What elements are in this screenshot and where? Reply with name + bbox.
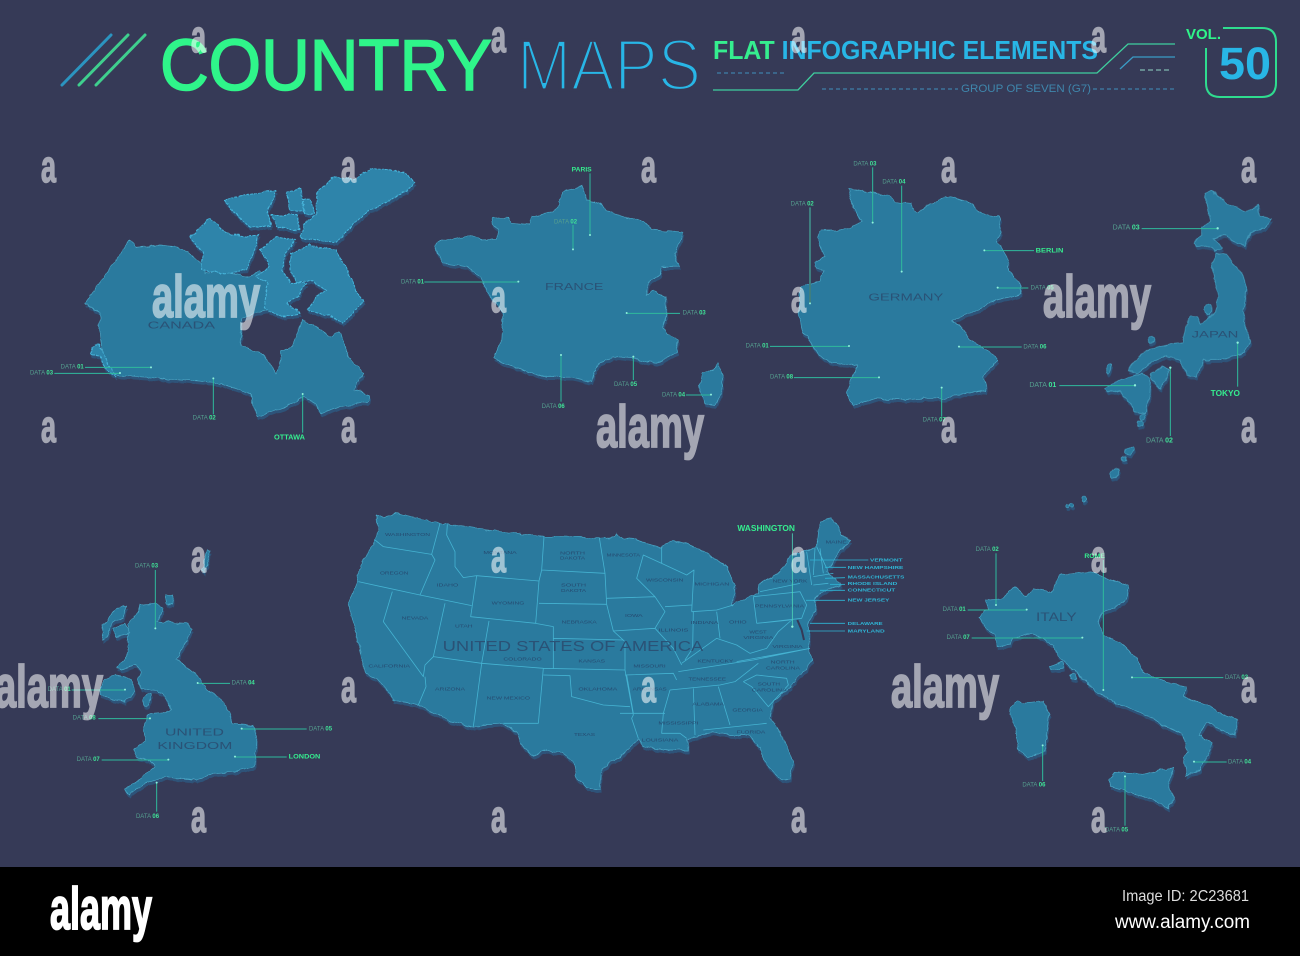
state names: east: ALABAMA: [692, 702, 725, 707]
callout: ottawa: [274, 393, 305, 441]
title: country maps: [160, 26, 701, 106]
volume badge: 50: [1219, 38, 1271, 89]
header slashes icon: [62, 35, 145, 85]
callout: data 03: [626, 311, 706, 317]
callout: data 06: [542, 354, 565, 410]
callout: data 08: [73, 716, 151, 722]
callout: data 06: DATA 06: [136, 814, 160, 820]
map: Italy: [943, 547, 1252, 833]
japan landmass: [1065, 191, 1271, 509]
watermark: small a marks: a: [941, 401, 957, 452]
callout: data 07: [923, 387, 946, 423]
callout: data 04: [1193, 760, 1252, 766]
callout: ottawa: OTTAWA: [274, 434, 305, 441]
callout: berlin: [983, 247, 1064, 254]
callouts: northeast states: MASSACHUSETTS: [848, 575, 905, 581]
state names: west: IDAHO: [437, 582, 459, 587]
callout: data 03: DATA 03: [853, 162, 877, 168]
callout: data 03: DATA 03: [30, 370, 54, 376]
callout: data 03: DATA 03: [1225, 675, 1249, 681]
callouts: northeast states: VERMONT: [870, 558, 903, 564]
volume badge: VOL.: [1186, 26, 1221, 43]
callout: data 05: [1105, 775, 1129, 833]
watermark: small a marks: a: [1091, 11, 1107, 62]
watermark: alamy marks: alamy: [891, 654, 999, 720]
state names: east: LOUISIANA: [642, 738, 680, 743]
state names: west: ARIZONA: [435, 686, 466, 691]
state names: west: NEVADA: [402, 616, 430, 621]
state names: east: ILLINOIS: [658, 627, 688, 632]
callout: data 06: [1022, 744, 1046, 789]
state names: east: VIRGINIA: [772, 644, 804, 649]
title: country maps: MAPS: [517, 26, 701, 106]
callout: data 01: [746, 344, 850, 350]
callout: data 01: DATA 01: [401, 279, 425, 285]
callout: data 02: [1146, 366, 1173, 445]
callout: data 02: [976, 547, 999, 606]
watermark: alamy marks: [0, 264, 1151, 720]
callout: data 05: [614, 356, 638, 388]
watermark: small a marks: a: [41, 401, 57, 452]
label: united kingdom: KINGDOM: [157, 741, 232, 752]
callout: london: LONDON: [289, 753, 321, 760]
watermark: small a marks: a: [1241, 141, 1257, 192]
callout: data 05: DATA 05: [614, 382, 638, 388]
state names: west: NORTH: [560, 550, 585, 555]
callout: data 01: [48, 687, 126, 693]
watermark: alamy marks: alamy: [596, 394, 704, 460]
callout: data 05: DATA 05: [309, 726, 333, 732]
callout: data 07: DATA 07: [77, 757, 100, 763]
watermark: small a marks: a: [491, 791, 507, 842]
callout: data 01: [61, 365, 152, 371]
watermark: small a marks: a: [491, 271, 507, 322]
callout: data 03: [1131, 675, 1249, 681]
callout: data 08: DATA 08: [770, 375, 794, 381]
watermark: small a marks: a: [791, 531, 807, 582]
watermark: alamy marks: alamy: [152, 264, 260, 330]
watermark: small a marks: a: [791, 11, 807, 62]
callout: data 07: [947, 635, 1083, 641]
callout: london: [234, 753, 321, 760]
france landmass: [435, 187, 723, 405]
watermark: alamy marks: alamy: [1043, 264, 1151, 330]
callout: data 01: [1029, 382, 1136, 389]
callout: data 05: [997, 285, 1054, 291]
callout: rome: [1084, 553, 1105, 691]
state names: east: WISCONSIN: [646, 577, 683, 582]
state names: east: NEW YORK: [773, 579, 809, 584]
watermark: alamy marks: alamy: [0, 654, 103, 720]
germany landmass: [798, 188, 1022, 405]
callout: data 03: [30, 370, 121, 376]
callout: data 08: [770, 375, 880, 381]
map: United Kingdom: [48, 550, 333, 820]
callout: data 08: DATA 08: [73, 716, 96, 722]
state names: west: CALIFORNIA: [368, 663, 411, 668]
map: France: [401, 167, 723, 410]
callout: data 01: DATA 01: [746, 344, 769, 350]
map: United States of America: [348, 513, 905, 790]
watermark: small a marks: a: [341, 661, 357, 712]
state names: east: MICHIGAN: [694, 581, 729, 586]
state names: west: KANSAS: [578, 658, 605, 663]
callout: data 07: DATA 07: [923, 417, 946, 423]
state names: east: OHIO: [729, 619, 747, 624]
watermark: small a marks: a: [191, 11, 207, 62]
callout: rome: ROME: [1084, 553, 1105, 560]
state names: east: ARKANSAS: [633, 687, 667, 692]
uk landmass: [100, 550, 257, 795]
usa landmass: [348, 513, 852, 790]
footer logo: alamy: [50, 876, 152, 942]
callout: data 02: [554, 219, 578, 250]
group of seven caption: GROUP OF SEVEN (G7): [961, 83, 1091, 95]
callout: data 05: DATA 05: [1031, 285, 1054, 291]
callout: data 02: [193, 377, 216, 422]
callout: data 01: [401, 279, 519, 285]
callout: data 01: DATA 01: [48, 687, 71, 693]
callout: data 03: DATA 03: [1113, 225, 1140, 232]
callout: data 03: [135, 564, 159, 629]
state names: east: CAROLINA: [752, 687, 788, 692]
callout: data 01: DATA 01: [61, 365, 84, 371]
state names: east: IOWA: [625, 613, 644, 618]
state names: east: SOUTH: [758, 681, 780, 686]
label: japan: JAPAN: [1192, 330, 1238, 340]
callout: data 07: DATA 07: [947, 635, 970, 641]
state names: west: OKLAHOMA: [578, 687, 619, 692]
state names: west: WYOMING: [492, 601, 525, 606]
callout: washington: [737, 523, 795, 628]
callout: data 03: [1113, 225, 1219, 232]
state names: west: TEXAS: [574, 732, 595, 737]
callout: data 04: [662, 392, 712, 398]
callout: data 06: DATA 06: [1022, 783, 1046, 789]
watermark: small a marks: a: [191, 531, 207, 582]
callout: washington: WASHINGTON: [737, 523, 795, 533]
callout: data 06: [958, 345, 1047, 351]
state names: west: NEW MEXICO: [487, 696, 531, 701]
country label: UNITED STATES OF AMERICA: [443, 639, 704, 655]
callout: data 02: DATA 02: [976, 547, 999, 553]
map: Canada: [30, 168, 415, 441]
watermark: small a marks: a: [341, 141, 357, 192]
map: Germany: [746, 162, 1064, 423]
watermark: small a marks: a: [1091, 531, 1107, 582]
state names: west: WASHINGTON: [385, 532, 430, 537]
callout: data 06: DATA 06: [542, 404, 565, 410]
callout: paris: [572, 167, 592, 236]
state names: east: WEST: [749, 630, 767, 635]
callout: data 01: DATA 01: [1029, 382, 1056, 389]
state names: west: SOUTH: [561, 583, 586, 588]
title: country maps: COUNTRY: [160, 26, 492, 106]
state names: east: VIRGINIA: [743, 635, 775, 640]
label: canada: CANADA: [148, 321, 215, 332]
state names: west: OREGON: [380, 570, 408, 575]
callouts: northeast states: DELAWARE: [848, 621, 883, 627]
callouts: northeast states: NEW JERSEY: [848, 598, 890, 604]
watermark: small a marks: a: [641, 661, 657, 712]
state names: west: DAKOTA: [560, 555, 586, 560]
map: Japan: [1029, 191, 1271, 509]
callout: data 04: DATA 04: [232, 681, 255, 687]
subtitle: flat infographic elements: FLAT INFOGRAPHIC ELEMENTS: [713, 35, 1098, 65]
state borders: east: [607, 547, 833, 738]
watermark: small a marks: a: [41, 141, 57, 192]
state names: west: NEBRASKA: [562, 619, 598, 624]
state names: east: MISSISSIPPI: [658, 720, 698, 725]
label: united kingdom: UNITED: [165, 728, 224, 739]
watermark: small a marks: a: [341, 401, 357, 452]
callout: paris: PARIS: [572, 167, 592, 174]
callouts: northeast states: MARYLAND: [848, 628, 885, 634]
callout: data 04: DATA 04: [1228, 760, 1252, 766]
state names: east: KENTUCKY: [697, 658, 733, 663]
footer image id: Image ID: 2C23681: [1122, 888, 1249, 905]
watermark: small a marks: a: [791, 271, 807, 322]
state names: east: GEORGIA: [732, 708, 764, 713]
callout: data 03: [853, 162, 877, 224]
volume badge: [1186, 26, 1276, 97]
callout: data 02: DATA 02: [791, 201, 814, 207]
state names: east: FLORIDA: [737, 729, 767, 734]
label: germany: GERMANY: [868, 293, 943, 304]
callout: data 05: [241, 726, 333, 732]
watermark: small a marks: a: [941, 141, 957, 192]
state names: west: [368, 532, 641, 737]
callout: data 02: DATA 02: [193, 416, 216, 422]
footer bar: [0, 867, 1300, 956]
watermark: small a marks: a: [191, 791, 207, 842]
callout: data 06: DATA 06: [1023, 345, 1047, 351]
callout: tokyo: TOKYO: [1211, 388, 1241, 398]
callout: data 04: DATA 04: [662, 392, 686, 398]
state names: east: [625, 539, 847, 743]
watermark: small a marks: a: [791, 791, 807, 842]
callout: data 01: DATA 01: [943, 607, 966, 613]
callout: data 03: DATA 03: [135, 564, 159, 570]
callout: data 06: [136, 782, 160, 820]
callouts: northeast states: NEW HAMPSHIRE: [848, 565, 904, 571]
callout: data 02: DATA 02: [1146, 438, 1173, 445]
label: united kingdom: [157, 728, 232, 752]
state names: east: INDIANA: [691, 620, 720, 625]
watermark: small a marks: a: [1091, 791, 1107, 842]
header circuit lines: [713, 44, 1175, 90]
callout: data 04: DATA 04: [882, 180, 906, 186]
watermark: small a marks: a: [491, 11, 507, 62]
callout: data 04: [882, 180, 906, 273]
callout: data 04: [197, 681, 255, 687]
callout: berlin: BERLIN: [1036, 247, 1064, 254]
label: italy: ITALY: [1036, 611, 1077, 624]
watermark: small a marks: a: [641, 141, 657, 192]
state names: west: MONTANA: [483, 550, 518, 555]
state names: east: TENNESSEE: [688, 677, 726, 682]
callout: data 02: [791, 201, 814, 304]
callout: tokyo: [1211, 341, 1241, 398]
canada landmass: [85, 168, 415, 417]
callout: data 05: DATA 05: [1105, 827, 1129, 833]
state names: east: NORTH: [771, 659, 795, 664]
state names: west: MINNESOTA: [607, 553, 641, 558]
callout: data 02: DATA 02: [554, 219, 578, 225]
state borders: west: [358, 523, 638, 738]
footer site: www.alamy.com: [1114, 912, 1250, 933]
callout: data 01: [943, 607, 1028, 613]
italy landmass: [980, 572, 1238, 808]
state names: east: MAINE: [826, 539, 847, 544]
callouts: northeast states: CONNECTICUT: [848, 587, 895, 593]
callouts: northeast states: [806, 558, 905, 634]
callout: data 03: DATA 03: [683, 311, 706, 317]
state names: east: PENNSYLVANIA: [755, 603, 805, 608]
watermark: small a marks: a: [491, 531, 507, 582]
watermark: small a marks: a: [1241, 401, 1257, 452]
callout: data 07: [77, 757, 169, 763]
label: france: FRANCE: [545, 282, 603, 293]
state names: east: CAROLINA: [766, 665, 801, 670]
state names: west: COLORADO: [503, 656, 542, 661]
state names: west: UTAH: [455, 623, 473, 628]
watermark: small a marks: a: [1241, 661, 1257, 712]
state names: east: MISSOURI: [633, 663, 666, 668]
state names: west: DAKOTA: [561, 588, 587, 593]
callouts: northeast states: RHODE ISLAND: [848, 581, 898, 587]
